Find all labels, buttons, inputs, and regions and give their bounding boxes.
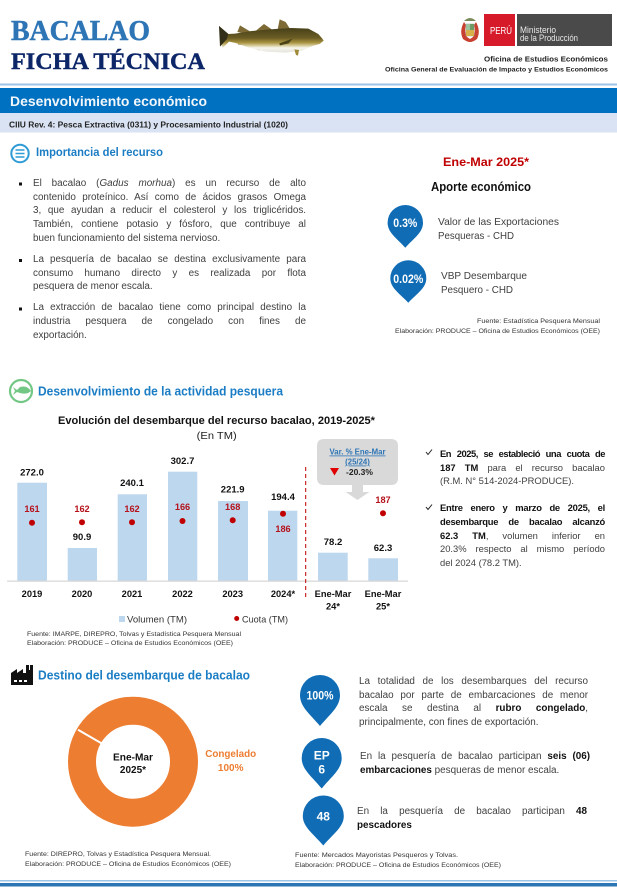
text block: En 2025, se estableció una cuota de — [440, 448, 605, 459]
bullets — [19, 182, 22, 310]
pin: 0.3% — [388, 205, 423, 248]
pin: 0.3%: 0.3% — [393, 216, 418, 230]
text block: Entre enero y marzo de 2025, el — [440, 502, 605, 513]
axis labels: 2023 — [222, 589, 243, 599]
period heading: Ene-Mar 2025* — [443, 155, 529, 169]
source: Fuente: IMARPE, DIREPRO, Tolvas y Estadística Pesquera Mensual — [27, 631, 242, 638]
value labels: 221.9 — [221, 484, 245, 496]
office names — [385, 54, 608, 74]
legend: Cuota (TM) — [242, 614, 288, 626]
text block: paragraphs: La pesquería de bacalao se destina exclusivamente para — [33, 254, 306, 265]
text block: paragraphs: pesquera de menor escala. — [33, 281, 153, 292]
axis labels: Ene-Mar — [315, 589, 352, 599]
donut chart: 2025* — [120, 765, 146, 776]
text block: paragraphs: exportación. — [33, 330, 87, 341]
source: Elaboración: PRODUCE – Oficina de Estudios Económicos (OEE) — [27, 640, 233, 647]
heading: Desenvolvimiento de la actividad pesquera — [38, 384, 284, 398]
text block: embarcaciones: En la pesquería de bacalao participan seis (06) — [360, 751, 590, 762]
donut label: 100% — [218, 763, 244, 774]
axis labels: 2020 — [72, 589, 92, 599]
logo: Ministerio de la Producción: de la Producción — [520, 33, 578, 43]
value labels: 78.2 — [324, 537, 342, 548]
text block: paragraphs: industria pesquera de congelado con fines de — [33, 316, 306, 327]
text block: paragraphs: contenido proteínico. Así como de ácidos grasos Omega — [33, 192, 306, 203]
value labels: 302.7 — [171, 456, 194, 467]
donut label: Congelado — [205, 749, 256, 760]
heading: Importancia del recurso — [36, 145, 163, 159]
value labels: 240.1 — [120, 478, 145, 489]
panel: datos de la flota — [295, 675, 590, 869]
classification band — [0, 113, 617, 132]
text block: 62.3 TM, volumen inferior en — [440, 530, 605, 541]
pin: EP 6 — [302, 738, 342, 788]
value labels: 90.9 — [73, 532, 91, 543]
office names: Oficina General de Evaluación de Impacto y Estudios Económicos — [385, 66, 608, 74]
legend — [119, 614, 288, 626]
quota labels: 162 — [124, 504, 140, 514]
icon: fish badge — [10, 380, 32, 402]
pin: 48 — [303, 796, 344, 846]
text block: 20.3% respecto al mismo período — [440, 543, 605, 554]
axis labels: 24* — [326, 602, 340, 612]
axis labels: 2021 — [122, 589, 142, 599]
text block: embarcaciones — [360, 750, 590, 780]
pin: 100%: 100% — [306, 688, 334, 702]
text block: paragraphs: También, contiene potasio y fósforo, que contribuye al — [33, 219, 306, 230]
logo: Ministerio de la Producción — [461, 14, 612, 46]
axis labels: 25* — [376, 602, 390, 612]
quota labels: 168 — [225, 502, 240, 512]
text block: pescadores: En la pesquería de bacalao participan 48 — [357, 806, 587, 817]
logo: Ministerio de la Producción: Ministerio — [520, 25, 556, 35]
panel: destino del desembarque — [11, 665, 256, 868]
pin: 0.02% — [390, 260, 426, 303]
quota labels: 186 — [275, 524, 291, 534]
callout: variación: Var. % Ene-Mar — [330, 448, 386, 456]
text block: rubro: bacalao por parte de embarcaciones de menor — [359, 690, 588, 701]
bars — [17, 472, 398, 581]
axis labels — [22, 589, 402, 612]
quota labels: 161 — [24, 504, 40, 514]
heading: Aporte económico — [431, 180, 531, 194]
source: Elaboración: PRODUCE – Oficina de Estudios Económicos (OEE) — [295, 862, 501, 869]
icon: check marks — [426, 450, 432, 510]
source: Fuente: Estadística Pesquera Mensual — [477, 318, 601, 325]
section banner: Desenvolvimiento económico — [10, 93, 207, 109]
icon: coat of arms — [461, 18, 479, 42]
text block: 187 TM para el recurso bacalao — [440, 462, 605, 473]
pin: EP 6: 6 — [318, 762, 325, 776]
callout: variación: -20.3% — [346, 468, 373, 477]
text block: paragraphs: consumo humano directo y es realizada por flota — [33, 268, 306, 279]
text block: paragraphs: El bacalao (Gadus morhua) es un recurso de alto — [33, 178, 306, 189]
text: VBP: Pesquero - CHD — [441, 285, 513, 296]
source — [27, 631, 242, 647]
panel: desenvolvimiento de la actividad pesquera — [7, 380, 408, 647]
text block: desembarque de bacalao alcanzó — [440, 516, 605, 527]
axis labels: 2024* — [271, 589, 296, 599]
text block: paragraphs — [33, 177, 306, 347]
source: Fuente: Mercados Mayoristas Pesqueros y Tolvas. — [295, 852, 458, 859]
panel: notas de cuota y desembarque — [426, 447, 605, 572]
quota labels — [24, 495, 391, 534]
pin: 100% — [300, 675, 340, 726]
text block: pescadores: pescadores — [357, 820, 412, 831]
source: Fuente: DIREPRO, Tolvas y Estadística Pesquera Mensual. — [25, 851, 211, 858]
text: VBP: VBP Desembarque — [441, 271, 527, 282]
quota labels: 166 — [175, 502, 190, 512]
value labels: 194.4 — [271, 492, 296, 503]
section banner — [0, 88, 617, 113]
pin: 48: 48 — [317, 810, 330, 824]
heading: Destino del desembarque de bacalao — [38, 668, 250, 682]
quota labels: 187 — [375, 495, 391, 505]
text block: paragraphs: buen funcionamiento del sistema nervioso. — [33, 233, 220, 244]
value labels: 62.3 — [374, 543, 392, 554]
text block: paragraphs: 3, que ayudan a reducir el colesterol y los triglicéridos. — [33, 205, 306, 216]
icon: list — [11, 145, 29, 162]
text block: embarcaciones: embarcaciones pesqueras de menor escala. — [360, 765, 559, 776]
value labels — [20, 456, 392, 554]
text block: rubro: escala se destina al rubro congelado, — [359, 703, 588, 714]
text block: (R.M. N° 514-2024-PRODUCE). — [440, 475, 574, 486]
source: Elaboración: PRODUCE – Oficina de Estudios Económicos (OEE) — [25, 861, 231, 868]
title — [11, 15, 205, 74]
text block: paragraphs: La extracción de bacalao tiene como principal destino la — [33, 302, 306, 313]
source: Elaboración: PRODUCE – Oficina de Estudios Económicos (OEE) — [395, 328, 600, 335]
panel: importancia del recurso — [11, 145, 306, 347]
value labels: 272.0 — [20, 468, 44, 478]
icon: factory — [11, 665, 33, 685]
title: FICHA TÉCNICA — [11, 49, 205, 74]
donut label — [205, 749, 256, 774]
text block: rubro: principalmente, con fines de exportación. — [359, 717, 539, 728]
bar chart — [7, 456, 408, 626]
callout: variación — [317, 439, 398, 500]
text: exportaciones: Pesqueras - CHD — [438, 231, 514, 242]
logo: Ministerio de la Producción: PERÚ — [490, 24, 512, 37]
source — [395, 318, 601, 335]
legend: Volumen (TM) — [127, 614, 187, 626]
source — [295, 852, 501, 869]
text block: pescadores — [357, 805, 587, 835]
source — [25, 851, 231, 868]
pin: EP 6: EP — [314, 748, 330, 762]
text block — [440, 447, 605, 572]
quota labels: 162 — [74, 504, 90, 514]
text block: rubro: La totalidad de los desembarques del recurso — [359, 676, 588, 687]
panel: aporte económico — [388, 155, 601, 335]
chart title: (En TM) — [197, 430, 237, 442]
icon: cod fish — [219, 19, 324, 56]
text block: del 2024 (78.2 TM). — [440, 557, 522, 568]
pin: 0.02%: 0.02% — [393, 272, 424, 286]
donut chart: Ene-Mar — [113, 752, 153, 764]
axis labels: 2022 — [172, 589, 193, 599]
text: exportaciones: Valor de las Exportaciones — [438, 217, 559, 228]
chart title — [58, 415, 376, 442]
text: exportaciones — [438, 217, 559, 242]
axis labels: 2019 — [22, 589, 42, 599]
text block: rubro — [359, 675, 588, 735]
title: BACALAO — [11, 15, 150, 47]
classification band: CIIU Rev. 4: Pesca Extractiva (0311) y Procesamiento Industrial (1020) — [9, 120, 288, 130]
text: VBP — [441, 271, 527, 296]
quota dots — [29, 510, 386, 526]
office names: Oficina de Estudios Económicos — [484, 54, 608, 64]
callout: variación: (25/24) — [345, 458, 370, 466]
donut chart — [78, 711, 184, 813]
axis labels: Ene-Mar — [365, 589, 402, 599]
chart title: Evolución del desembarque del recurso bacalao, 2019-2025* — [58, 415, 376, 427]
